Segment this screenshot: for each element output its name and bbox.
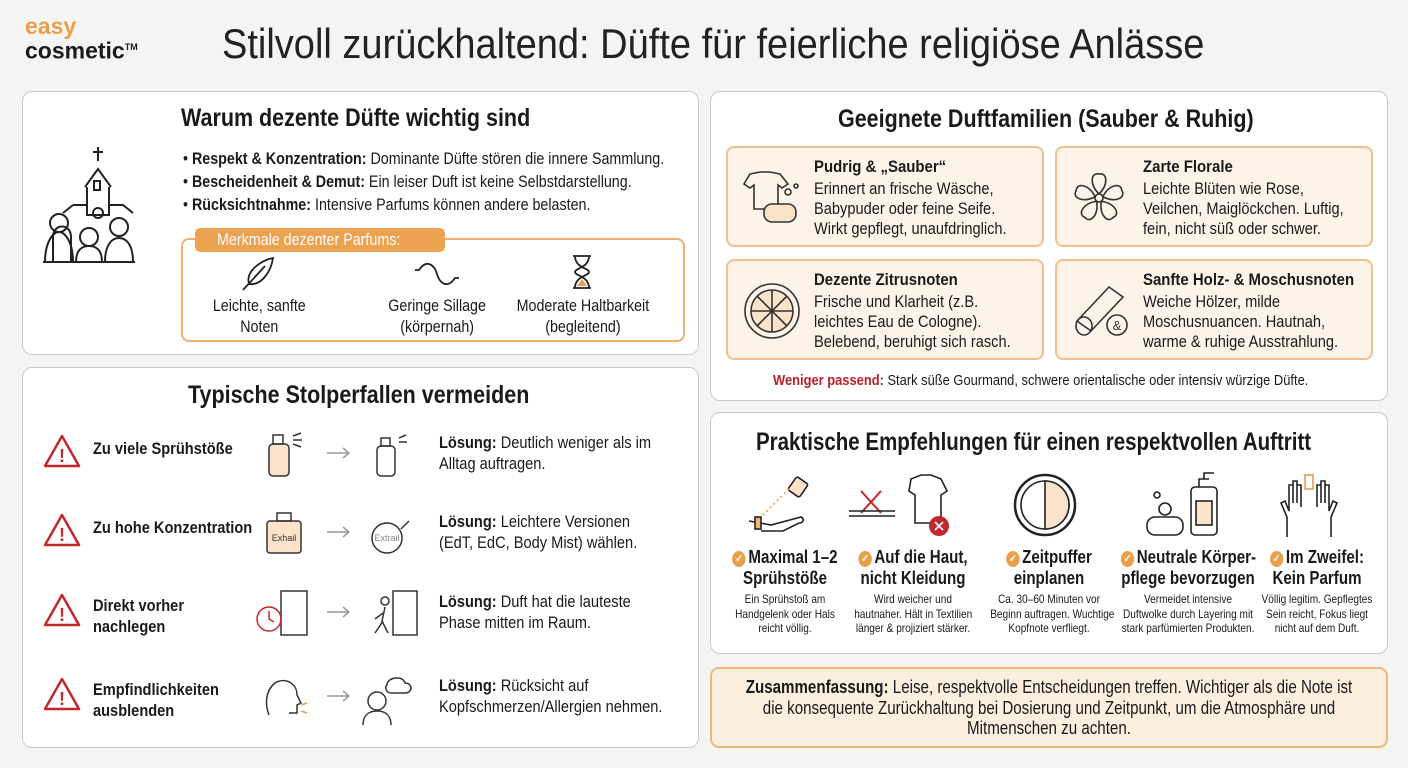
panel: Stolperfallen: [22, 367, 699, 748]
heading: Praktische Empfehlungen für einen respektvollen Auftritt: [756, 428, 1311, 456]
tip 1: [732, 547, 838, 635]
heading: Warum dezente Düfte wichtig sind: [181, 104, 530, 132]
icon: hourglass: [573, 255, 591, 289]
bullet list: [183, 149, 664, 214]
row 1: !: [59, 446, 65, 466]
card: Zarte Florale: Zarte Florale: [1143, 157, 1233, 176]
tip 1: Maximal 1–2: [748, 547, 838, 567]
tip 5: Sein reicht, Fokus liegt: [1266, 606, 1368, 620]
row 2: [44, 512, 637, 554]
card: Zitrus: Belebend, beruhigt sich rasch.: [814, 332, 1011, 351]
card: Pudrig: [726, 146, 1044, 247]
tip 5: Völlig legitim. Gepflegtes: [1262, 592, 1372, 606]
row 4: Empfindlichkeiten: [93, 680, 219, 699]
box: Merkmale: Leichte, sanfte: [213, 296, 305, 315]
row 1: Zu viele Sprühstöße: [93, 439, 233, 458]
box: Merkmale: [181, 238, 685, 342]
card: Pudrig: Pudrig & „Sauber“: [814, 157, 946, 176]
icon: wave: [415, 262, 459, 286]
card: Zitrus: [726, 259, 1044, 360]
card: Zarte Florale: Leichte Blüten wie Rose,: [1143, 179, 1304, 198]
tip 3: Kopfnote verfliegt.: [1008, 621, 1090, 635]
card: Zarte Florale: fein, nicht süß oder schwer.: [1143, 219, 1321, 238]
tip 4: Neutrale Körper-: [1137, 547, 1256, 567]
tip 2: länger & projiziert stärker.: [856, 621, 970, 635]
card: Zitrus: Frische und Klarheit (z.B.: [814, 292, 978, 311]
row 3: Direkt vorher: [93, 596, 184, 615]
tip 2: hautnaher. Hält in Textilien: [854, 606, 972, 620]
card: Pudrig: Babypuder oder feine Seife.: [814, 199, 995, 218]
row 2: Zu hohe Konzentration: [93, 518, 252, 537]
row 4: ausblenden: [93, 701, 174, 720]
bullet list: • Respekt & Konzentration: Dominante Düfte stören die innere Sammlung.: [183, 149, 664, 168]
tip 2: nicht Kleidung: [860, 568, 966, 588]
row 1: Alltag auftragen.: [439, 454, 545, 473]
row 2: !: [59, 525, 65, 545]
logo: easy: [25, 13, 76, 39]
summary box: Zusammenfassung: Leise, respektvolle Entscheidungen treffen. Wichtiger als die Note ist: [746, 677, 1352, 697]
summary box: die konsequente Zurückhaltung bei Dosierung und Zeitpunkt, um die Atmosphäre und: [763, 698, 1335, 718]
card: Pudrig: Erinnert an frische Wäsche,: [814, 179, 994, 198]
box: Merkmale: Moderate Haltbarkeit: [517, 296, 649, 315]
panel: Warum dezente Düfte: [22, 91, 699, 355]
tip 1: Sprühstöße: [743, 568, 827, 588]
box: Merkmale: Noten: [240, 317, 278, 336]
row 4: Kopfschmerzen/Allergien nehmen.: [439, 697, 662, 716]
box: Merkmale: Geringe Sillage: [388, 296, 486, 315]
icons row: [748, 472, 1338, 537]
badge: [195, 228, 445, 252]
tip 4: Vermeidet intensive: [1144, 592, 1232, 606]
tip 1: reicht völlig.: [758, 621, 812, 635]
tip 5: nicht auf dem Duft.: [1275, 621, 1359, 635]
row 4: !: [59, 689, 65, 709]
row 3: [44, 590, 631, 636]
title: Stilvoll zurückhaltend: Düfte für feierliche religiöse Anlässe: [222, 20, 1204, 67]
tip 4: [1120, 547, 1256, 635]
tip 5: Im Zweifel:: [1286, 547, 1364, 567]
tip 3: Beginn auftragen. Wuchtige: [990, 606, 1114, 620]
panel: Duftfamilien: [710, 91, 1388, 401]
tip 3: einplanen: [1014, 568, 1084, 588]
tip 3: Ca. 30–60 Minuten vor: [998, 592, 1100, 606]
summary box: [710, 667, 1388, 748]
logo: [25, 13, 138, 64]
card: Holz: [1055, 259, 1373, 360]
card: Zarte Florale: [1055, 146, 1373, 247]
box: Merkmale: (begleitend): [545, 317, 621, 336]
card: Zitrus: leichtes Eau de Cologne).: [814, 312, 981, 331]
logo: cosmeticTM: [25, 38, 138, 64]
tip 3: ✓: [1009, 553, 1017, 565]
card: Holz: Weiche Hölzer, milde: [1143, 292, 1280, 311]
heading: Typische Stolperfallen vermeiden: [188, 381, 529, 409]
summary box: Mitmenschen zu achten.: [967, 718, 1131, 738]
tip 1: Handgelenk oder Hals: [735, 606, 835, 620]
card: Pudrig: Wirkt gepflegt, unaufdringlich.: [814, 219, 1007, 238]
icon: feather: [242, 256, 274, 291]
row 1: [44, 432, 651, 477]
tip 5: [1262, 547, 1372, 635]
note: weniger passend: Weniger passend: Stark süße Gourmand, schwere orientalische oder intensiv würzige Düfte.: [773, 372, 1308, 389]
row 4: Lösung: Rücksicht auf: [439, 676, 588, 695]
tip 5: ✓: [1273, 553, 1281, 565]
tip 3: Zeitpuffer: [1022, 547, 1092, 567]
panel: Praktische Empfehlungen: [710, 412, 1388, 654]
row 4: [44, 676, 662, 725]
box: Merkmale: (körpernah): [400, 317, 474, 336]
tip 1: ✓: [735, 553, 743, 565]
row 2: Lösung: Leichtere Versionen: [439, 512, 630, 531]
row 3: Lösung: Duft hat die lauteste: [439, 592, 631, 611]
icon: church with people: [43, 147, 135, 263]
tip 2: Auf die Haut,: [874, 547, 968, 567]
badge: Merkmale dezenter Parfums:: [217, 230, 400, 249]
card: Zitrus: Dezente Zitrusnoten: [814, 270, 958, 289]
row 2: (EdT, EdC, Body Mist) wählen.: [439, 533, 637, 552]
bullet list: • Rücksichtnahme: Intensive Parfums können andere belasten.: [183, 195, 590, 214]
row 1: Lösung: Deutlich weniger als im: [439, 433, 651, 452]
row 3: nachlegen: [93, 617, 165, 636]
tip 4: Duftwolke durch Layering mit: [1123, 606, 1253, 620]
tip 2: Wird weicher und: [874, 592, 952, 606]
card: Holz: &: [1113, 318, 1122, 333]
tip 2: [854, 547, 972, 635]
row 3: Phase mitten im Raum.: [439, 613, 591, 632]
card: Zarte Florale: Veilchen, Maiglöckchen. Luftig,: [1143, 199, 1344, 218]
row 2: Extrail: [374, 533, 400, 543]
tip 2: ✓: [861, 553, 869, 565]
row 2: Exhail: [272, 533, 296, 543]
tip 1: Ein Sprühstoß am: [745, 592, 825, 606]
tip 5: Kein Parfum: [1272, 568, 1362, 588]
card: Holz: warme & ruhige Ausstrahlung.: [1143, 332, 1338, 351]
row 3: !: [59, 605, 65, 625]
tip 3: [990, 547, 1114, 635]
tip 4: stark parfümierten Produkten.: [1122, 621, 1254, 635]
card: Holz: Sanfte Holz- & Moschusnoten: [1143, 270, 1354, 289]
tip 4: pflege bevorzugen: [1121, 568, 1255, 588]
tip 4: ✓: [1124, 553, 1131, 565]
card: Holz: Moschusnuancen. Hautnah,: [1143, 312, 1325, 331]
heading: Geeignete Duftfamilien (Sauber & Ruhig): [838, 105, 1254, 133]
bullet list: • Bescheidenheit & Demut: Ein leiser Duft ist keine Selbstdarstellung.: [183, 172, 632, 191]
